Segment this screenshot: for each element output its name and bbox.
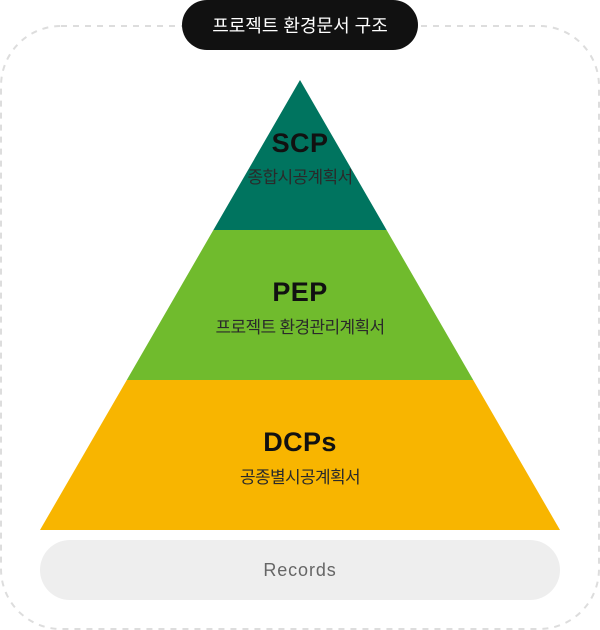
pyramid tier: PEP: PEP: [272, 277, 328, 307]
pyramid tier: SCP: 종합시공계획서: [248, 168, 352, 187]
pyramid tier: DCPs: DCPs: [263, 427, 337, 457]
pyramid tier: SCP: [213, 80, 387, 230]
pyramid tier: PEP: 프로젝트 환경관리계획서: [216, 318, 384, 337]
title pill: [182, 0, 418, 50]
pyramid tier: DCPs: 공종별시공계획서: [240, 468, 360, 487]
pyramid tier: SCP: SCP: [272, 128, 328, 158]
title pill: 프로젝트 환경문서 구조: [212, 16, 388, 36]
records bar: Records: [263, 560, 337, 580]
records bar: [40, 540, 560, 600]
pyramid tier: PEP: [127, 230, 473, 380]
pyramid tier: DCPs: [40, 380, 560, 530]
